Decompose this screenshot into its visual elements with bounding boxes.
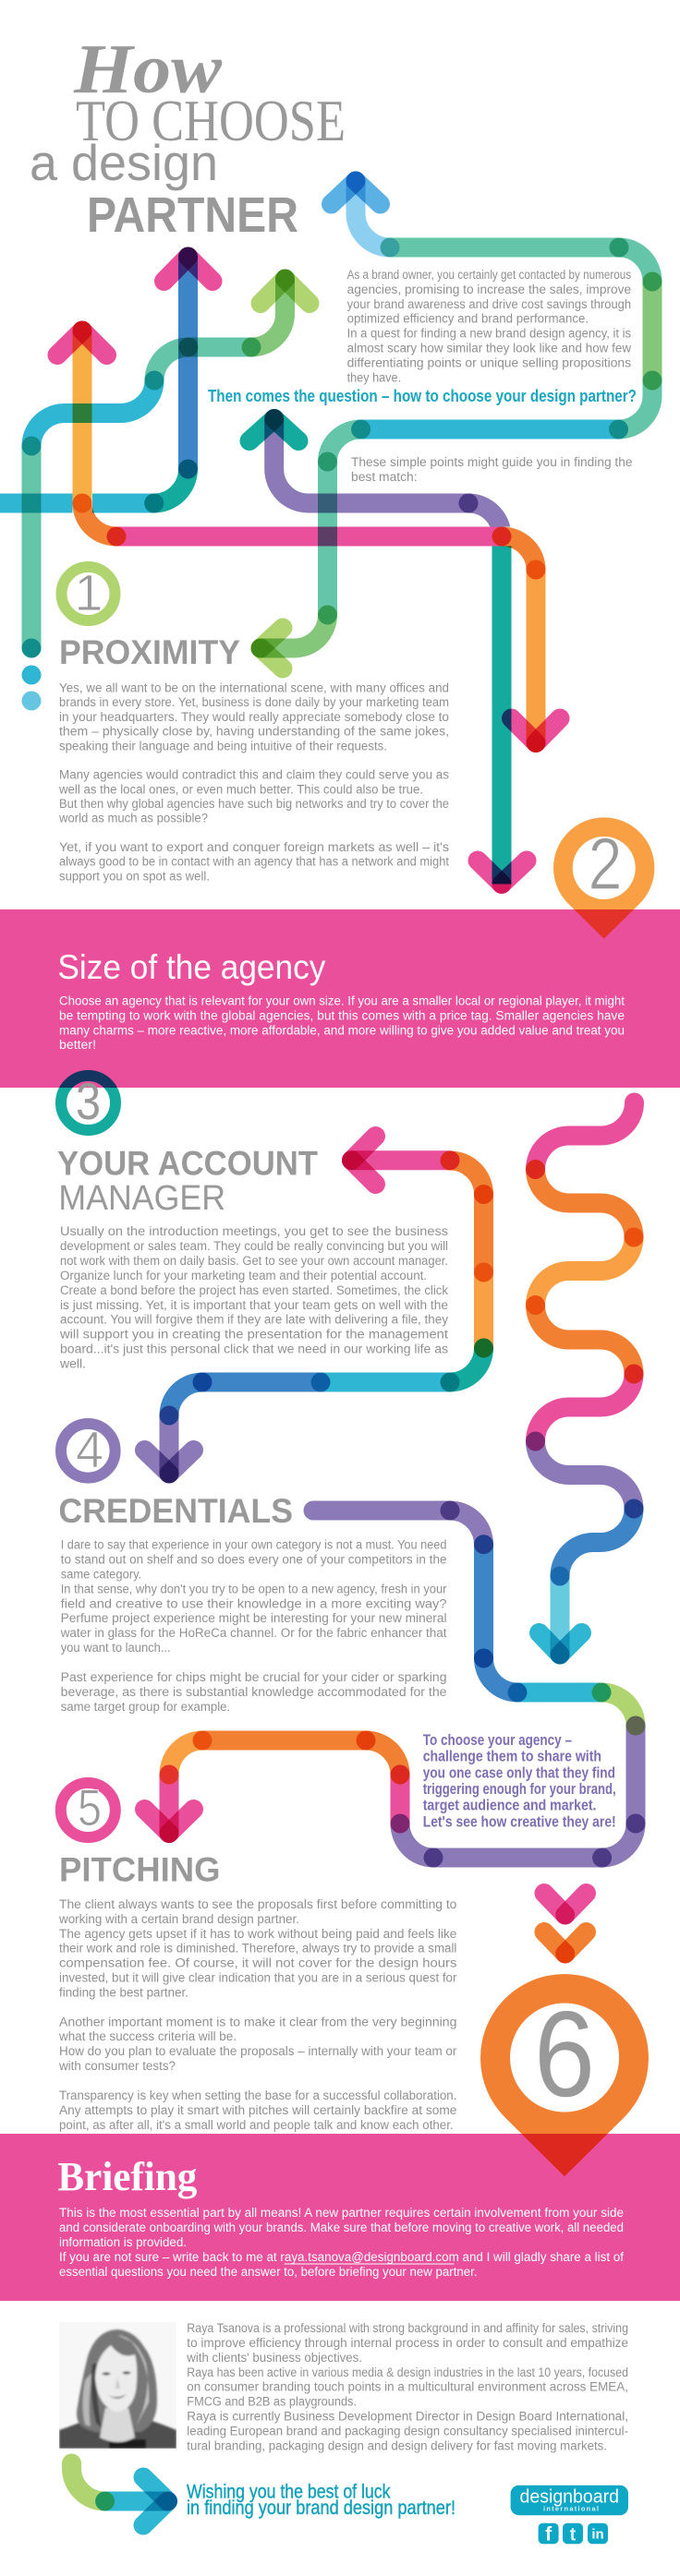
callout: triggering enough for your brand,: [423, 1781, 616, 1798]
closing message: [187, 2482, 455, 2519]
number 6 pin: 6: [534, 1986, 595, 2122]
account manager text: well.: [59, 1357, 86, 1370]
size of the agency text: many charms – more reactive, more affordable, and more willing to give you added value and treat you: [59, 1023, 625, 1038]
number 6 pin: [480, 1974, 649, 2176]
callout: To choose your agency –: [423, 1732, 572, 1749]
pitching text: finding the best partner.: [59, 1985, 188, 2000]
pitching text: [58, 1897, 457, 2132]
heading: credentials: CREDENTIALS: [58, 1492, 293, 1530]
biography text: Raya is currently Business Development Director in Design Board International,: [187, 2410, 628, 2423]
proximity text: always good to be in contact with an agency that has a network and might: [59, 855, 449, 869]
title: TO CHOOSE: [76, 88, 346, 153]
icon: facebook: f: [545, 2524, 552, 2545]
size of the agency text: better!: [59, 1038, 96, 1052]
briefing text: This is the most essential part by all means! A new partner requires certain involvement from your side: [59, 2206, 624, 2220]
credentials text: [60, 1538, 447, 1714]
proximity text: [58, 681, 449, 883]
intro text: almost scary how similar they look like and how few: [347, 342, 631, 355]
credentials text: same target group for example.: [61, 1700, 230, 1714]
arrow route: top right, from the teal line up to the light blue arrow: [261, 181, 652, 668]
pitching text: Any attempts to play it smart with pitches will certainly backfire at some: [59, 2103, 456, 2117]
size of the agency text: Choose an agency that is relevant for your own size. If you are a smaller local or regional player, it might: [59, 993, 625, 1008]
heading: your account manager: YOUR ACCOUNT: [57, 1145, 318, 1182]
size of the agency text: [59, 993, 625, 1052]
biography text: Raya Tsanova is a professional with strong background in and affinity for sales, striving: [187, 2321, 628, 2335]
biography text: FMCG and B2B as playgrounds.: [187, 2395, 357, 2408]
pitching text: How do you plan to evaluate the proposals – internally with your team or: [59, 2044, 457, 2058]
title: [30, 30, 346, 243]
biography text: Raya has been active in various media & design industries in the last 10 years, focused: [187, 2365, 628, 2379]
proximity text: support you on spot as well.: [59, 869, 210, 883]
guide text: [351, 455, 632, 484]
arrow route: yellow line with pink arrow: [57, 331, 502, 536]
credentials text: to stand out on shelf and so does every one of your competitors in the: [61, 1553, 446, 1566]
proximity text: well as the local ones, or even much better. This could also be true.: [58, 782, 423, 796]
credentials text: I dare to say that experience in your own category is not a must. You need: [61, 1538, 446, 1551]
credentials text: field and creative to use their knowledge in a more exciting way?: [61, 1597, 446, 1610]
account manager text: will support you in creating the presentation for the management: [59, 1327, 448, 1341]
pitching text: point, as after all, it's a small world and people talk and know each other.: [59, 2118, 454, 2132]
number 1 badge: [61, 563, 115, 621]
pitching text: compensation fee. Of course, it will not cover for the design hours: [59, 1956, 457, 1970]
proximity text: world as much as possible?: [58, 812, 208, 825]
account manager text: Create a bond before the project has even started. Sometimes, the click: [60, 1283, 448, 1297]
proximity text: Yes, we all want to be on the international scene, with many offices and: [59, 681, 449, 694]
proximity text: Yet, if you want to export and conquer foreign markets as well – it's: [59, 840, 449, 854]
account manager text: account. You will forgive them if they are late with delivering a file, they: [60, 1312, 448, 1326]
arrow route: orange line down to pink arrow: [502, 536, 560, 742]
proximity text: brands in every store. Yet, business is done daily by your marketing team: [59, 695, 449, 709]
number 4 badge: [61, 1420, 115, 1478]
account manager text: Organize lunch for your marketing team and their potential account.: [60, 1269, 427, 1282]
photo: portrait of Raya Tsanova: [59, 2322, 176, 2449]
double chevron: orange: [544, 1932, 586, 1954]
logo: designboard international: international: [543, 2504, 599, 2513]
number 3 badge: 3: [76, 1072, 101, 1130]
number 1 badge: 1: [74, 563, 103, 621]
intro text: As a brand owner, you certainly get contacted by numerous: [347, 268, 631, 282]
biography text: tural branding, packaging design and design delivery for fast moving markets.: [187, 2439, 607, 2452]
arrow route: right winding snake to cyan arrow: [536, 1102, 634, 1655]
proximity text: Many agencies would contradict this and claim they could serve you as: [59, 768, 449, 782]
proximity text: them – physically close by, having understanding of the same jokes,: [59, 725, 449, 739]
briefing text: information is provided.: [59, 2235, 187, 2249]
proximity text: But then why global agencies have such big networks and try to cover the: [59, 797, 449, 811]
title: a design: [30, 134, 218, 191]
size of the agency text: be tempting to work with the global agencies, but this comes with a price tag. Smaller agencies have: [59, 1008, 625, 1023]
proximity text: in your headquarters. They would really appreciate somebody close to: [59, 710, 449, 724]
heading: your account manager: [57, 1145, 318, 1218]
biography text: on consumer branding touch points in a multicultural environment across EMEA,: [187, 2380, 628, 2393]
closing message: in finding your brand design partner!: [187, 2498, 455, 2519]
callout: challenge them to share with: [423, 1749, 601, 1765]
account manager text: not work with them on daily basis. Get to see your own account manager.: [60, 1254, 448, 1268]
arrow route: teal line down to pink arrow: [478, 547, 527, 885]
intro text: differentiating points or unique selling propositions: [347, 355, 631, 369]
number 2 pin: [553, 817, 654, 939]
biography text: leading European brand and packaging design consultancy specialised inintercul-: [187, 2425, 628, 2438]
icon: linkedin: in: [591, 2526, 604, 2543]
arrow route: credentials line around callout to pink arrow: [144, 1511, 636, 1858]
bottom arrow: [72, 2463, 168, 2525]
pitching text: invested, but it will give clear indication that you are in a serious quest for: [59, 1970, 457, 1985]
pitching text: what the success criteria will be.: [58, 2029, 237, 2043]
pitching text: The client always wants to see the proposals first before committing to: [59, 1897, 456, 1911]
callout: Let's see how creative they are!: [423, 1813, 616, 1830]
number 5 badge: 5: [78, 1778, 102, 1836]
double chevron: pink: [544, 1893, 586, 1915]
number 3 badge: [61, 1072, 115, 1130]
heading: proximity: PROXIMITY: [59, 633, 240, 671]
credentials text: beverage, as there is substantial knowledge accommodated for the: [61, 1685, 446, 1699]
logo: designboard international: [511, 2486, 628, 2515]
intro text: [347, 268, 631, 384]
callout: [423, 1732, 616, 1830]
biography text: with clients' business objectives.: [186, 2351, 362, 2365]
pitching text: Transparency is key when setting the base for a successful collaboration.: [59, 2088, 456, 2102]
guide text: These simple points might guide you in finding the: [351, 455, 632, 469]
intro text: they have.: [347, 370, 401, 384]
callout: target audience and market.: [423, 1798, 597, 1814]
intro text: In a quest for finding a new brand design agency, it is: [347, 327, 631, 341]
credentials text: you want to launch...: [61, 1641, 171, 1655]
account manager text: development or sales team. They could be really convincing but you will: [60, 1239, 448, 1253]
briefing text: and considerate onboarding with your brands. Make sure that before moving to creative work, all needed: [59, 2221, 624, 2234]
title: PARTNER: [87, 187, 298, 243]
intro text: optimized efficiency and brand performance.: [347, 312, 589, 326]
briefing text: If you are not sure – write back to me at raya.tsanova@designboard.com and I will gladly share a list of: [59, 2250, 624, 2264]
biography text: to improve efficiency through internal process in order to consult and empathize: [187, 2336, 628, 2350]
account manager text: Usually on the introduction meetings, you get to see the business: [60, 1224, 448, 1238]
heading: pitching: PITCHING: [59, 1851, 220, 1889]
heading: your account manager: MANAGER: [58, 1179, 225, 1218]
social icons: [539, 2523, 608, 2545]
pitching text: working with a certain brand design partner.: [58, 1912, 299, 1926]
pitching text: The agency gets upset if it has to work without being paid and feels like: [59, 1927, 456, 1941]
pitching text: Another important moment is to make it clear from the very beginning: [59, 2015, 456, 2029]
icon: twitter: t: [570, 2524, 577, 2545]
arrow route: blue line up to pink arrow: [0, 257, 212, 503]
credentials text: same category.: [61, 1568, 141, 1581]
account manager text: board...it's just this personal click that we need in our working life as: [60, 1342, 448, 1355]
number 4 badge: 4: [76, 1420, 103, 1478]
callout: you one case only that they find: [423, 1764, 615, 1781]
credentials text: water in glass for the HoReCa channel. Or for the fabric enhancer that: [60, 1626, 447, 1640]
title: How: [73, 30, 222, 108]
account manager text: [59, 1224, 448, 1370]
pitching text: their work and role is diminished. Therefore, always try to provide a small: [59, 1941, 456, 1956]
number 2 pin: 2: [588, 823, 623, 905]
credentials text: Past experience for chips might be crucial for your cider or sparking: [61, 1670, 446, 1684]
briefing text: [59, 2206, 624, 2279]
heading: briefing: Briefing: [57, 2154, 197, 2199]
arrow route: purple line up to teal arrow: [249, 419, 502, 536]
closing message: Wishing you the best of luck: [187, 2482, 391, 2502]
credentials text: In that sense, why don't you try to be open to a new agency, fresh in your: [61, 1583, 447, 1595]
heading: size of the agency: Size of the agency: [57, 948, 326, 986]
proximity text: speaking their language and being intuitive of their requests.: [59, 739, 387, 752]
logo: designboard international: designboard: [519, 2487, 619, 2508]
band: briefing background: [0, 2134, 680, 2301]
arrow route: left, cyan and green line to lime arrow: [31, 279, 310, 648]
pitching text: with consumer tests?: [58, 2059, 176, 2073]
arrow route: pink and orange line to left pink arrow, continuing to purple arrow: [144, 1136, 484, 1474]
guide text: best match:: [351, 470, 418, 484]
briefing text: essential questions you need the answer to, before briefing your new partner.: [59, 2265, 477, 2279]
intro text: your brand awareness and drive cost savings through: [347, 297, 631, 311]
intro text: agencies, promising to increase the sales, improve: [347, 283, 631, 296]
band: size of the agency background: [0, 909, 680, 1088]
account manager text: is just missing. Yet, it is important that your team gets on well with the: [60, 1298, 448, 1312]
end dots of left line: [22, 639, 41, 711]
number 5 badge: [61, 1778, 115, 1837]
credentials text: Perfume project experience might be interesting for your new mineral: [61, 1611, 446, 1625]
biography text: [186, 2321, 628, 2452]
